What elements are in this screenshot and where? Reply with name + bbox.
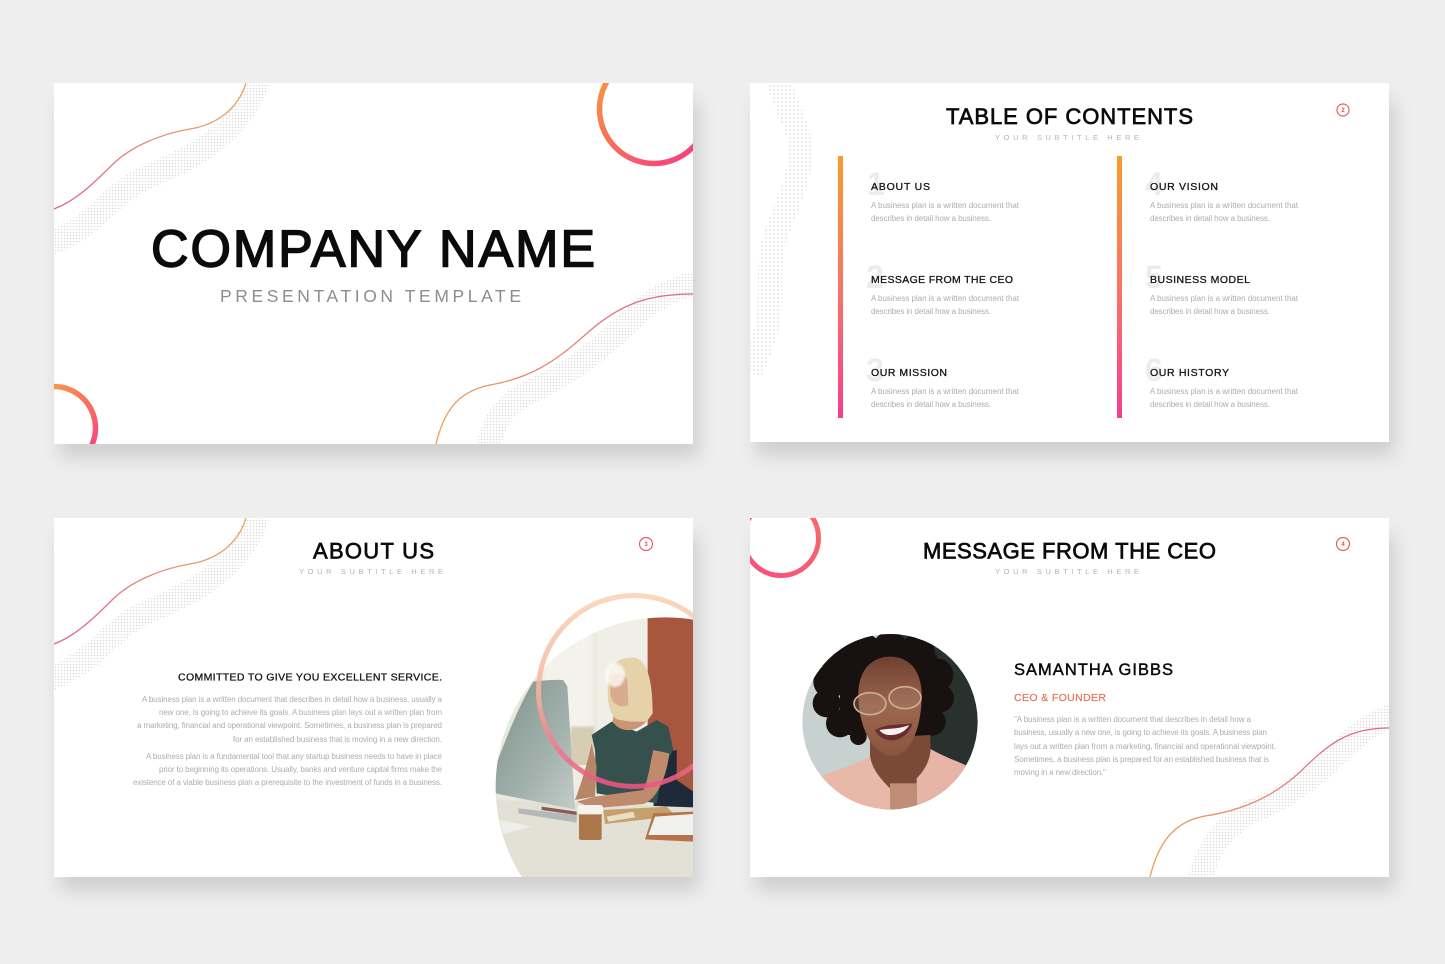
slide 2: table of contents bbox=[750, 78, 1395, 456]
CEO quote bbox=[1014, 715, 1276, 777]
item 5: business model bbox=[1145, 259, 1299, 316]
page badge 3 bbox=[640, 538, 652, 550]
slide 1 title: COMPANY NAME bbox=[151, 220, 595, 278]
item 2: message from the ceo bbox=[866, 259, 1020, 316]
slide 3 subtitle: YOUR SUBTITLE HERE bbox=[299, 567, 443, 576]
item 4: our vision: 4 bbox=[1145, 166, 1163, 202]
item 1: about us: A business plan is a written document that bbox=[871, 201, 1020, 210]
slide 1 subtitle: PRESENTATION TEMPLATE bbox=[220, 286, 521, 306]
item 6: our history: OUR HISTORY bbox=[1150, 367, 1229, 379]
CEO portrait in circle bbox=[800, 632, 980, 818]
CEO name: SAMANTHA GIBBS bbox=[1014, 661, 1173, 679]
page badge 2 bbox=[1337, 104, 1349, 116]
item 5: business model: describes in detail how a business. bbox=[1150, 307, 1270, 316]
slide 2 heading: TABLE OF CONTENTS bbox=[946, 104, 1193, 129]
slide 2 dotted wave bbox=[750, 78, 800, 372]
page badge 4 bbox=[1336, 538, 1350, 550]
CEO quote: moving in a new direction." bbox=[1014, 768, 1106, 777]
CEO role: CEO & FOUNDER bbox=[1014, 692, 1106, 704]
item 5: business model: A business plan is a written document that bbox=[1150, 294, 1299, 303]
item 4: our vision: describes in detail how a business. bbox=[1150, 214, 1270, 223]
item 3: our mission: A business plan is a written document that bbox=[871, 387, 1020, 396]
slide 3: about us bbox=[50, 515, 730, 891]
item 4: our vision bbox=[1145, 166, 1299, 223]
CEO quote: "A business plan is a written document that describes in detail how a bbox=[1014, 715, 1252, 724]
item 1: about us: 1 bbox=[867, 166, 885, 202]
item 5: business model: 5 bbox=[1145, 259, 1163, 295]
service paragraphs: for an established business that is moving in a new direction. bbox=[233, 735, 442, 744]
item 2: message from the ceo: A business plan is a written document that bbox=[871, 294, 1020, 303]
item 3: our mission: OUR MISSION bbox=[871, 367, 947, 379]
item 3: our mission bbox=[866, 352, 1020, 409]
item 2: message from the ceo: MESSAGE FROM THE CEO bbox=[871, 274, 1013, 286]
slide 4 subtitle: YOUR SUBTITLE HERE bbox=[995, 567, 1139, 576]
slide 4 decorations bbox=[744, 500, 1395, 880]
item 4: our vision: A business plan is a written document that bbox=[1150, 201, 1299, 210]
service paragraphs bbox=[133, 695, 443, 787]
item 6: our history: A business plan is a written document that bbox=[1150, 387, 1299, 396]
service heading: COMMITTED TO GIVE YOU EXCELLENT SERVICE. bbox=[178, 672, 442, 684]
service paragraphs: A business plan is a written document that describes in detail how a business, usually a bbox=[142, 695, 443, 704]
page badge 4: 4 bbox=[1341, 542, 1345, 548]
slide 1: title slide bbox=[54, 83, 704, 464]
item 3: our mission: 3 bbox=[866, 352, 884, 388]
item 4: our vision: OUR VISION bbox=[1150, 181, 1218, 193]
item 1: about us bbox=[867, 166, 1020, 223]
CEO quote: Sometimes, a business plan is prepared for an established business that is bbox=[1014, 755, 1269, 764]
slide 2 subtitle: YOUR SUBTITLE HERE bbox=[995, 133, 1139, 142]
item 5: business model: BUSINESS MODEL bbox=[1150, 274, 1250, 286]
right gradient bar bbox=[1117, 156, 1122, 418]
service paragraphs: a marketing, financial and operational viewpoint. Sometimes, a business plan is prepared bbox=[137, 721, 442, 730]
item 1: about us: describes in detail how a business. bbox=[871, 214, 991, 223]
service paragraphs: prior to beginning its operations. Usually, banks and venture capital firms make the bbox=[159, 765, 443, 774]
desk objects bbox=[603, 807, 676, 824]
service paragraphs: new one, is going to achieve its goals. A business plan lays out a written plan from bbox=[159, 708, 442, 717]
office photo in circular crop bbox=[496, 617, 693, 877]
service paragraphs: A business plan is a fundamental tool that any startup business needs to have in place bbox=[146, 752, 443, 761]
mockup sheet of four slides bbox=[54, 83, 1400, 896]
woman bbox=[592, 720, 673, 803]
item 3: our mission: describes in detail how a business. bbox=[871, 400, 991, 409]
item 2: message from the ceo: describes in detail how a business. bbox=[871, 307, 991, 316]
slide 4: message from the ceo bbox=[744, 500, 1395, 891]
item 6: our history: describes in detail how a business. bbox=[1150, 400, 1270, 409]
slide 1 decorations bbox=[54, 83, 693, 444]
item 6: our history: 6 bbox=[1145, 352, 1163, 388]
page badge 3: 3 bbox=[644, 542, 648, 548]
item 6: our history bbox=[1145, 352, 1299, 409]
slide 3 heading: ABOUT US bbox=[313, 538, 434, 564]
slide 4 heading: MESSAGE FROM THE CEO bbox=[923, 538, 1216, 564]
item 1: about us: ABOUT US bbox=[871, 181, 930, 193]
page badge 2: 2 bbox=[1341, 108, 1345, 114]
item 2: message from the ceo: 2 bbox=[866, 259, 884, 295]
service paragraphs: existence of a viable business plan a prerequisite to the investment of funds in a business. bbox=[133, 778, 442, 787]
peach to pink ring bbox=[536, 593, 693, 789]
CEO quote: lays out a written plan from a marketing, financial and operational viewpoint. bbox=[1014, 742, 1276, 751]
slide 3 wave decoration bbox=[50, 515, 258, 678]
left gradient bar bbox=[838, 156, 843, 418]
CEO quote: business, usually a new one, is going to achieve its goals. A business plan bbox=[1014, 728, 1267, 737]
